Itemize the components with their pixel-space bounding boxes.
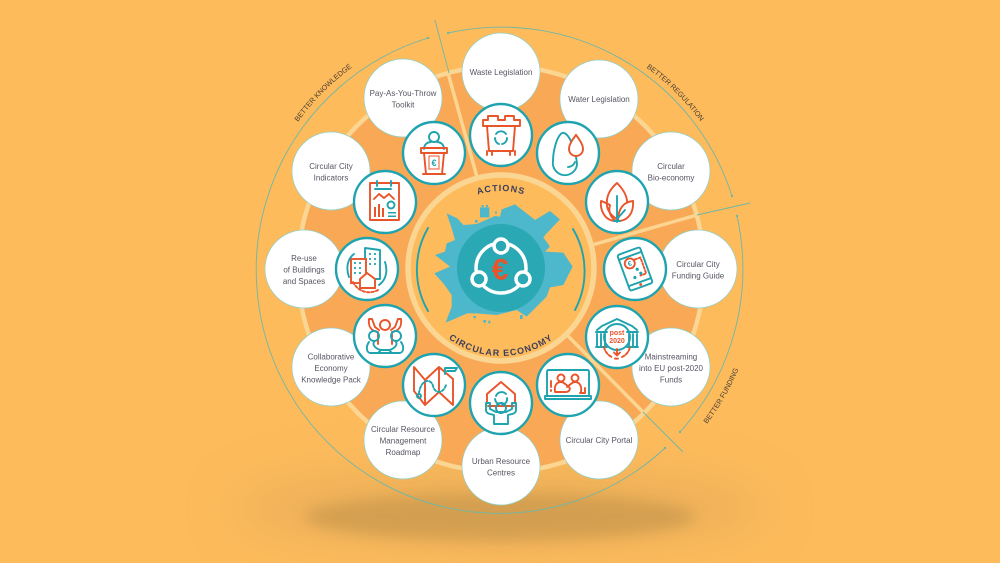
- outer ring band: [298, 66, 704, 472]
- action bubble: waste legislation: [462, 33, 540, 111]
- action bubble: mainstreaming: [632, 328, 710, 406]
- action bubble: urban resource centres: Urban Resource: [472, 457, 531, 466]
- shared network symbol with euro: [472, 239, 530, 293]
- heading: circular economy: CIRCULAR ECONOMY: [450, 334, 551, 356]
- action bubble: circular city funding guide: [659, 230, 737, 308]
- action bubble: collaborative economy knowledge pack: Economy: [314, 364, 348, 373]
- label: better funding: BETTER FUNDING: [703, 368, 738, 424]
- action bubble: circular city indicators: [292, 132, 370, 210]
- icon: funding guide phone: [604, 238, 666, 300]
- action bubble: pay-as-you-throw toolkit: Toolkit: [392, 100, 415, 110]
- action bubble: circular city funding guide: Circular City: [676, 260, 720, 269]
- action bubble: mainstreaming: into EU post-2020: [639, 364, 704, 373]
- heading: actions: ACTIONS: [478, 184, 524, 194]
- action bubble: urban resource centres: Centres: [487, 468, 515, 478]
- action bubble: waste legislation: Waste Legislation: [470, 68, 532, 77]
- action bubble: circular bio-economy: Bio-economy: [648, 174, 694, 182]
- action bubble: re-use of buildings: and Spaces: [283, 277, 325, 286]
- icon: city portal laptop: [537, 354, 599, 416]
- action bubble: collaborative economy knowledge pack: Knowledge Pack: [301, 376, 362, 384]
- city skyline: [434, 204, 573, 323]
- action bubble: circular city portal: Circular City Portal: [566, 436, 633, 445]
- action bubble: re-use of buildings: Re-use: [291, 254, 317, 263]
- action bubble: urban resource centres: [462, 427, 540, 505]
- icon: bio leaf: [586, 171, 648, 233]
- icon: re-use of buildings: [336, 238, 398, 300]
- action bubble: water legislation: [560, 60, 638, 138]
- action bubble: collaborative economy knowledge pack: [292, 328, 370, 406]
- icon: funding guide phone: €: [627, 260, 633, 268]
- ground shadow: [230, 468, 770, 548]
- icon: collaborative economy people: [354, 305, 416, 367]
- action bubble: circular city funding guide: Funding Guide: [672, 272, 725, 280]
- section dividers: [435, 20, 750, 452]
- icon: urban resource centre: [470, 372, 532, 434]
- label: better knowledge: BETTER KNOWLEDGE: [294, 64, 352, 122]
- hub teal disc: [457, 224, 545, 312]
- icon: post 2020 building: post: [610, 330, 625, 337]
- action bubble: water legislation: Water Legislation: [568, 95, 630, 104]
- action bubble: circular bio-economy: Circular: [657, 162, 685, 171]
- icon: speaker lectern: [403, 122, 465, 184]
- icon: waste bin: [470, 104, 532, 166]
- action bubble: circular resource management roadmap: [364, 401, 442, 479]
- action bubble: circular bio-economy: [632, 132, 710, 210]
- icon: resource roadmap: [403, 354, 465, 416]
- outer thin arcs: [256, 27, 743, 513]
- action bubble: circular city portal: [560, 401, 638, 479]
- central hub disc: [408, 175, 594, 361]
- action bubble: circular city indicators: Indicators: [314, 174, 348, 182]
- action bubble: mainstreaming: Funds: [660, 376, 682, 384]
- icon: speaker lectern: €: [431, 158, 437, 168]
- action bubble: circular resource management roadmap: Circular Resource: [371, 425, 436, 434]
- action bubble: circular resource management roadmap: Roadmap: [386, 448, 421, 457]
- icon: water drops: [537, 122, 599, 184]
- action bubble: re-use of buildings: of Buildings: [283, 266, 325, 274]
- hub rotation arrows: [417, 228, 585, 311]
- icon: indicators chart: [354, 171, 416, 233]
- shared network symbol with euro: €: [492, 254, 509, 286]
- action bubble: re-use of buildings: [265, 230, 343, 308]
- action bubble: collaborative economy knowledge pack: Collaborative: [308, 352, 355, 362]
- label: better regulation: BETTER REGULATION: [646, 64, 704, 121]
- action bubble: mainstreaming: Mainstreaming: [645, 352, 697, 362]
- action bubble: circular resource management roadmap: Management: [380, 436, 427, 446]
- action bubble: pay-as-you-throw toolkit: Pay-As-You-Throw: [370, 89, 437, 98]
- icon: post 2020 building: 2020: [609, 338, 625, 345]
- action bubble: circular city indicators: Circular City: [309, 162, 353, 171]
- icon: post 2020 building: [586, 306, 648, 368]
- action bubble: pay-as-you-throw toolkit: [364, 59, 442, 137]
